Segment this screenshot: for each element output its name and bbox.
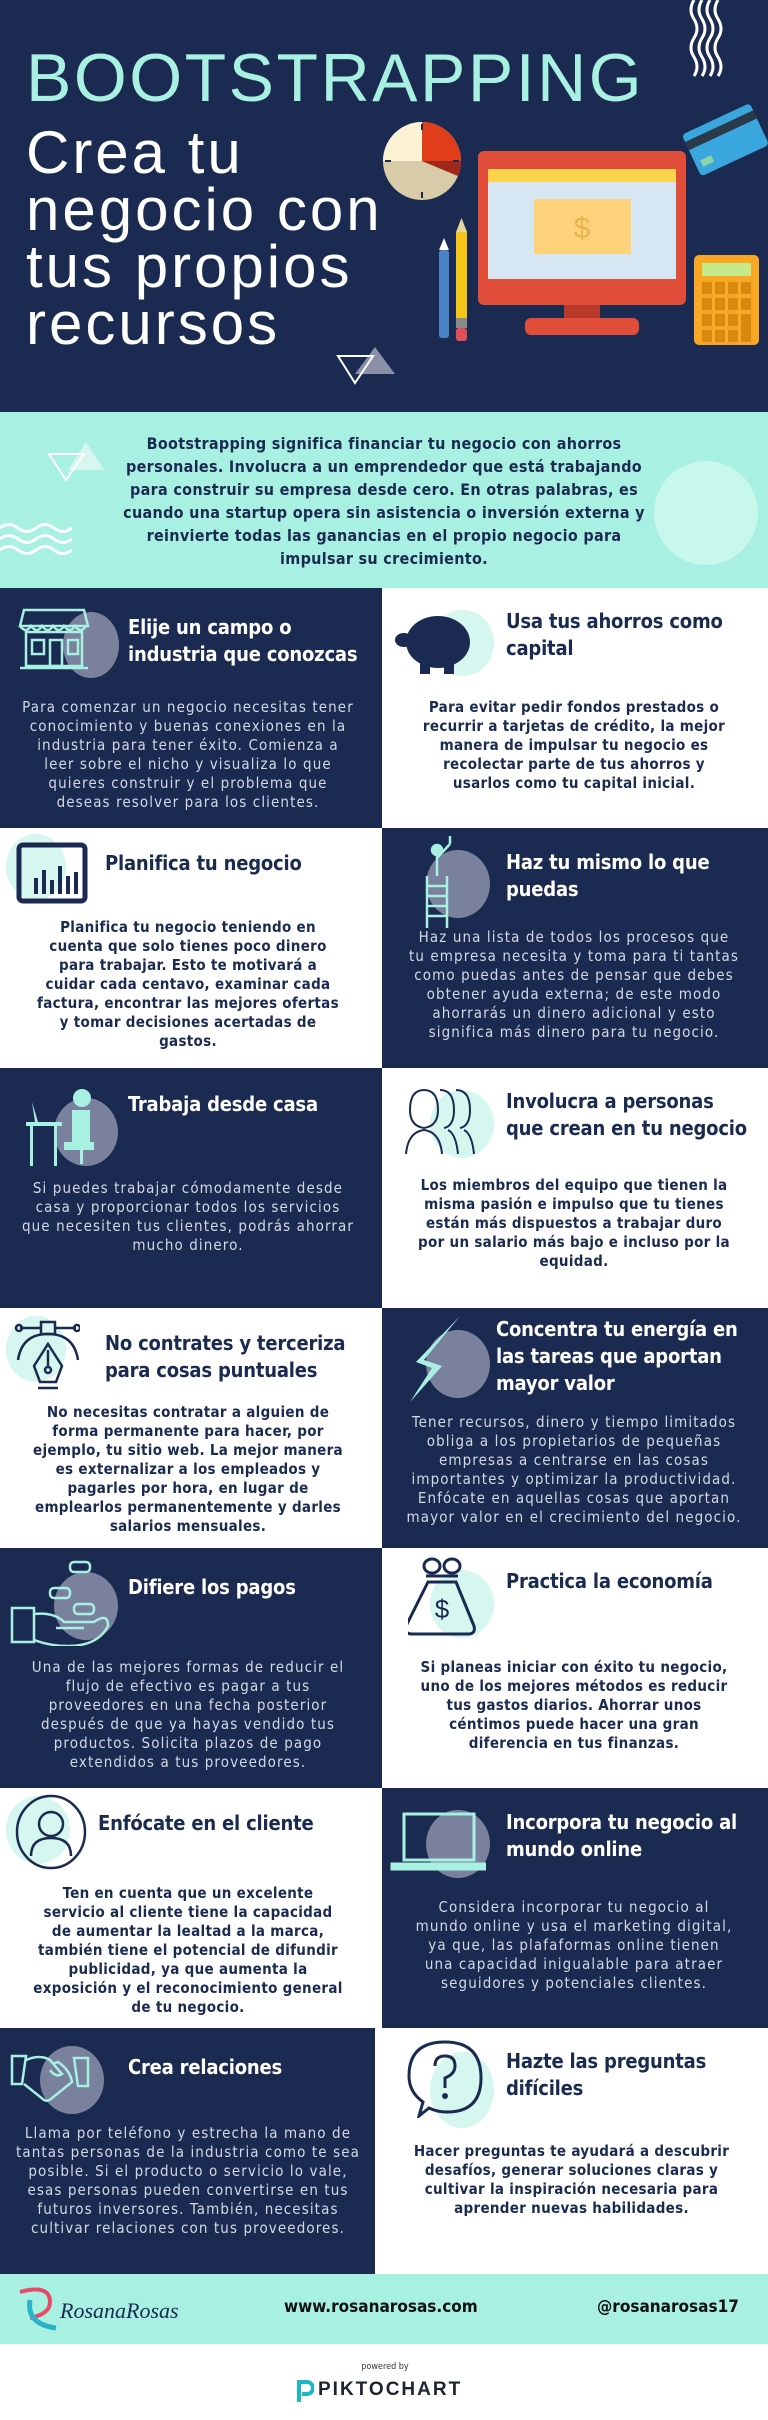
heading: Elije un campo o — [128, 615, 291, 639]
body: extendidos a tus proveedores. — [70, 1753, 306, 1771]
body: uno de los mejores métodos es reducir — [421, 1677, 727, 1695]
illustration: desk items — [336, 0, 768, 385]
icon: waves — [691, 0, 721, 76]
body: tus gastos diarios. Ahorrar unos — [446, 1696, 702, 1714]
body: servicio al cliente tiene la capacidad — [43, 1903, 332, 1921]
intro panel — [0, 412, 768, 588]
icon: monitor — [478, 151, 686, 335]
body — [37, 918, 339, 1050]
panel: practica economía — [382, 1548, 768, 1788]
heading: mayor valor — [496, 1371, 615, 1395]
panel: involucra personas — [382, 1068, 768, 1308]
body: casa y proporcionar todos los servicios — [36, 1198, 340, 1216]
body: deseas resolver para los clientes. — [57, 793, 319, 811]
icon: triangles — [338, 347, 395, 383]
body: Enfócate en aquellas cosas que aportan — [418, 1489, 730, 1507]
heading — [506, 1810, 737, 1861]
body: mayor valor en el crecimiento del negocio. — [406, 1508, 742, 1526]
body: factura, encontrar las mejores ofertas — [37, 994, 339, 1012]
body: de tu negocio. — [131, 1998, 245, 2016]
icon: calculator — [694, 255, 759, 345]
subtitle: negocio con — [26, 176, 383, 243]
icon: piggy bank — [395, 616, 470, 674]
body — [16, 2124, 360, 2237]
heading — [506, 609, 723, 660]
icon: hand with coins — [10, 1560, 110, 1646]
panel: concentra energía — [382, 1308, 768, 1548]
handle: @rosanarosas17 — [597, 2297, 739, 2317]
subtitle — [26, 119, 383, 357]
logo: RosanaRosas — [60, 2298, 179, 2323]
piktochart credit — [290, 2362, 480, 2408]
panel: planifica — [0, 828, 382, 1068]
body: ahorrarás un dinero adicional y esto — [432, 1004, 716, 1022]
icon: credit card — [682, 103, 768, 176]
icon: money bag — [408, 1558, 476, 1636]
header panel — [0, 0, 768, 412]
subtitle: recursos — [26, 290, 280, 357]
footer — [0, 2274, 768, 2344]
subtitle: tus propios — [26, 233, 352, 300]
panel: haz tu mismo — [382, 828, 768, 1068]
body: tantas personas de la industria como te sea — [16, 2143, 360, 2161]
body: Haz una lista de todos los procesos que — [419, 928, 729, 946]
body: mundo online y usa el marketing digital, — [416, 1917, 732, 1935]
body: obtener ayuda externa; de este modo — [427, 985, 721, 1003]
heading: Haz tu mismo lo que — [506, 850, 710, 874]
body: recolectar parte de tus ahorros y — [443, 755, 705, 773]
body — [32, 1658, 344, 1771]
body — [414, 2142, 729, 2217]
body: pagarles por hora, en lugar de — [67, 1479, 309, 1497]
body: que necesiten tus clientes, podrás ahorrar — [22, 1217, 354, 1235]
body: Tener recursos, dinero y tiempo limitados — [412, 1413, 736, 1431]
icon: question bubble — [408, 2040, 482, 2118]
body — [409, 928, 739, 1041]
body: flujo de efectivo es pagar a tus — [66, 1677, 310, 1695]
body: desafíos, generar soluciones claras y — [425, 2161, 718, 2179]
body — [416, 1898, 732, 1992]
body: exposición y el reconocimiento general — [33, 1979, 343, 1997]
piktochart credit: PIKTOCHART — [318, 2379, 462, 2400]
intro text — [123, 434, 645, 568]
body: quieres construir y el problema que — [48, 774, 328, 792]
body: esas personas pueden convertirse en tus — [27, 2181, 349, 2199]
icon: user circle — [16, 1794, 86, 1870]
body: Ten en cuenta que un excelente — [63, 1884, 313, 1902]
body: y tomar decisiones acertadas de — [60, 1013, 316, 1031]
body: productos. Solicita plazos de pago — [54, 1734, 322, 1752]
heading: capital — [506, 636, 573, 660]
body: diferencia en tus finanzas. — [469, 1734, 679, 1752]
icon: laptop — [390, 1812, 486, 1870]
body: Si planeas iniciar con éxito tu negocio, — [421, 1658, 727, 1676]
heading: puedas — [506, 877, 578, 901]
body: mucho dinero. — [132, 1236, 244, 1254]
panel: no contrates — [0, 1308, 382, 1548]
website: www.rosanarosas.com — [284, 2297, 478, 2317]
body: significa más dinero para tu negocio. — [429, 1023, 719, 1041]
icon: pencils — [439, 218, 467, 341]
heading — [105, 1331, 345, 1382]
heading: difíciles — [506, 2076, 583, 2100]
body: céntimos puede hacer una gran — [449, 1715, 699, 1733]
heading: industria que conozcas — [128, 642, 357, 666]
panel: usa tus ahorros — [382, 588, 768, 828]
body: cultivar relaciones con tus proveedores. — [31, 2219, 345, 2237]
intro text: para construir su empresa desde cero. En otras palabras, es — [130, 480, 638, 499]
subtitle: Crea tu — [26, 119, 244, 186]
icon: chart — [16, 842, 88, 904]
intro text: reinvierte todas las ganancias en el propio negocio para — [147, 526, 621, 545]
heading: Enfócate en el cliente — [98, 1811, 314, 1835]
intro text: personales. Involucra a un emprendedor que está trabajando — [126, 457, 642, 476]
body: obliga a los propietarios de pequeñas — [427, 1432, 721, 1450]
body: de aumentar la lealtad a la marca, — [52, 1922, 324, 1940]
heading: Concentra tu energía en — [496, 1317, 738, 1341]
body: también tiene el potencial de difundir — [38, 1941, 338, 1959]
body: Los miembros del equipo que tienen la — [421, 1176, 727, 1194]
body — [423, 698, 725, 792]
body — [406, 1413, 742, 1526]
icon: ladder man — [426, 836, 452, 928]
heading: Incorpora tu negocio al — [506, 1810, 737, 1834]
heading — [506, 2049, 706, 2100]
body: tu empresa necesita y toma para ti tantas — [409, 947, 739, 965]
intro text: cuando una startup opera sin asistencia o inversión externa y — [123, 503, 645, 522]
piktochart credit: powered by — [361, 2362, 409, 2372]
body — [421, 1658, 728, 1752]
body: ejemplo, tu sitio web. La mejor manera — [33, 1441, 343, 1459]
heading: que crean en tu negocio — [506, 1116, 747, 1140]
heading: Difiere los pagos — [128, 1575, 296, 1599]
body: industria para tener éxito. Comienza a — [37, 736, 339, 754]
body: usarlos como tu capital inicial. — [453, 774, 695, 792]
body — [33, 1403, 343, 1535]
body: cuidar cada centavo, examinar cada — [46, 975, 330, 993]
panel: trabaja desde casa — [0, 1068, 382, 1308]
body — [22, 1179, 354, 1254]
heading: Involucra a personas — [506, 1089, 714, 1113]
body: publicidad, ya que aumenta la — [68, 1960, 307, 1978]
heading — [496, 1317, 738, 1395]
icon: handshake — [10, 2054, 90, 2102]
body: No necesitas contratar a alguien de — [47, 1403, 329, 1421]
body: misma pasión e impulso que tu tienes — [424, 1195, 724, 1213]
body: Planifica tu negocio teniendo en — [60, 918, 316, 936]
body: equidad. — [540, 1252, 608, 1270]
body: aprender nuevas habilidades. — [454, 2199, 689, 2217]
body: por un salario más bajo e incluso por la — [418, 1233, 730, 1251]
icon: money bag: $ — [435, 1594, 450, 1624]
panel: hazte preguntas — [375, 2028, 768, 2276]
body: proveedores en una fecha posterior — [49, 1696, 327, 1714]
heading: las tareas que aportan — [496, 1344, 722, 1368]
icon: monitor: $ — [574, 212, 591, 245]
icon: store — [18, 608, 90, 670]
body: futuros inversores. También, necesitas — [37, 2200, 339, 2218]
panel: incorpora online — [382, 1788, 768, 2028]
heading: Practica la economía — [506, 1569, 713, 1593]
body: es externalizar a los empleados y — [56, 1460, 320, 1478]
icon: clock — [383, 122, 461, 200]
body: Para comenzar un negocio necesitas tener — [22, 698, 354, 716]
heading: mundo online — [506, 1837, 642, 1861]
body — [22, 698, 354, 811]
title: BOOTSTRAPPING — [26, 40, 644, 116]
body: leer sobre el nicho y visualiza lo que — [44, 755, 332, 773]
heading: Hazte las preguntas — [506, 2049, 706, 2073]
intro text: Bootstrapping significa financiar tu negocio con ahorros — [147, 434, 621, 453]
panel: enfócate cliente — [0, 1788, 382, 2028]
heading — [506, 850, 710, 901]
body — [33, 1884, 343, 2016]
heading: No contrates y terceriza — [105, 1331, 345, 1355]
body: ya que, las plafaformas online tienen — [428, 1936, 720, 1954]
icon: pen tool — [14, 1320, 80, 1390]
body: cuenta que solo tienes poco dinero — [49, 937, 327, 955]
body: seguidores y potenciales clientes. — [441, 1974, 707, 1992]
body: una capacidad inigualable para atraer — [425, 1955, 723, 1973]
body: después de que ya hayas vendido tus — [41, 1715, 335, 1733]
icon: lightning — [410, 1316, 460, 1402]
heading — [506, 1089, 747, 1140]
body: empresas a centrarse en las cosas — [439, 1451, 709, 1469]
body: conocimiento y buenas conexiones en la — [30, 717, 346, 735]
body: importantes y optimizar la productividad. — [412, 1470, 736, 1488]
panel: difiere pagos — [0, 1548, 382, 1788]
logo — [16, 2286, 176, 2332]
heading: Crea relaciones — [128, 2055, 282, 2079]
body: gastos. — [159, 1032, 217, 1050]
heading: Planifica tu negocio — [105, 851, 302, 875]
panel: elije un campo — [0, 588, 382, 828]
heading: Usa tus ahorros como — [506, 609, 723, 633]
body: como puedas antes de pensar que debes — [414, 966, 734, 984]
body: Para evitar pedir fondos prestados o — [429, 698, 719, 716]
body: recurrir a tarjetas de crédito, la mejor — [423, 717, 725, 735]
heading: para cosas puntuales — [105, 1358, 317, 1382]
body: Considera incorporar tu negocio al — [439, 1898, 709, 1916]
heading — [128, 615, 357, 666]
icon: people — [405, 1089, 475, 1154]
body: manera de impulsar tu negocio es — [440, 736, 708, 754]
body: posible. Si el producto o servicio lo vale, — [28, 2162, 348, 2180]
body: salarios mensuales. — [110, 1517, 266, 1535]
body: Una de las mejores formas de reducir el — [32, 1658, 344, 1676]
body: Hacer preguntas te ayudará a descubrir — [414, 2142, 729, 2160]
heading: Trabaja desde casa — [128, 1092, 318, 1116]
body: están más dispuestos a trabajar duro — [426, 1214, 722, 1232]
body: cultivar la inspiración necesaria para — [425, 2180, 718, 2198]
intro text: impulsar su crecimiento. — [280, 549, 488, 568]
icon: person at desk — [26, 1089, 94, 1166]
body: emplearlos permanentemente y darles — [35, 1498, 341, 1516]
decorations — [0, 442, 758, 565]
body: Si puedes trabajar cómodamente desde — [33, 1179, 343, 1197]
body: para trabajar. Esto te motivará a — [59, 956, 317, 974]
body: forma permanente para hacer, por — [52, 1422, 324, 1440]
body — [418, 1176, 730, 1270]
panel: crea relaciones — [0, 2028, 375, 2276]
body: Llama por teléfono y estrecha la mano de — [25, 2124, 351, 2142]
